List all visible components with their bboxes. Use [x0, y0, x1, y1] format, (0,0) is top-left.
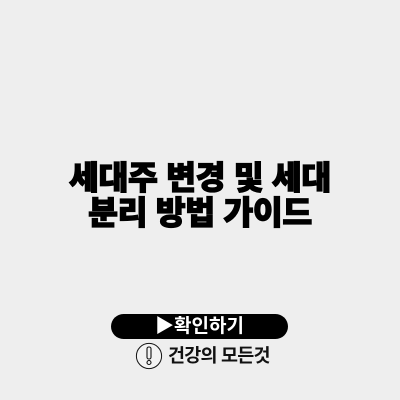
brand name: 건강의 모든것 [168, 345, 270, 366]
icon: exclamation circle [136, 342, 162, 370]
title [68, 160, 331, 231]
button: confirm [111, 314, 288, 339]
title: 분리 방법 가이드 [88, 195, 312, 231]
title: 세대주 변경 및 세대 [69, 160, 331, 196]
button: confirm: ▶확인하기 [155, 316, 244, 337]
